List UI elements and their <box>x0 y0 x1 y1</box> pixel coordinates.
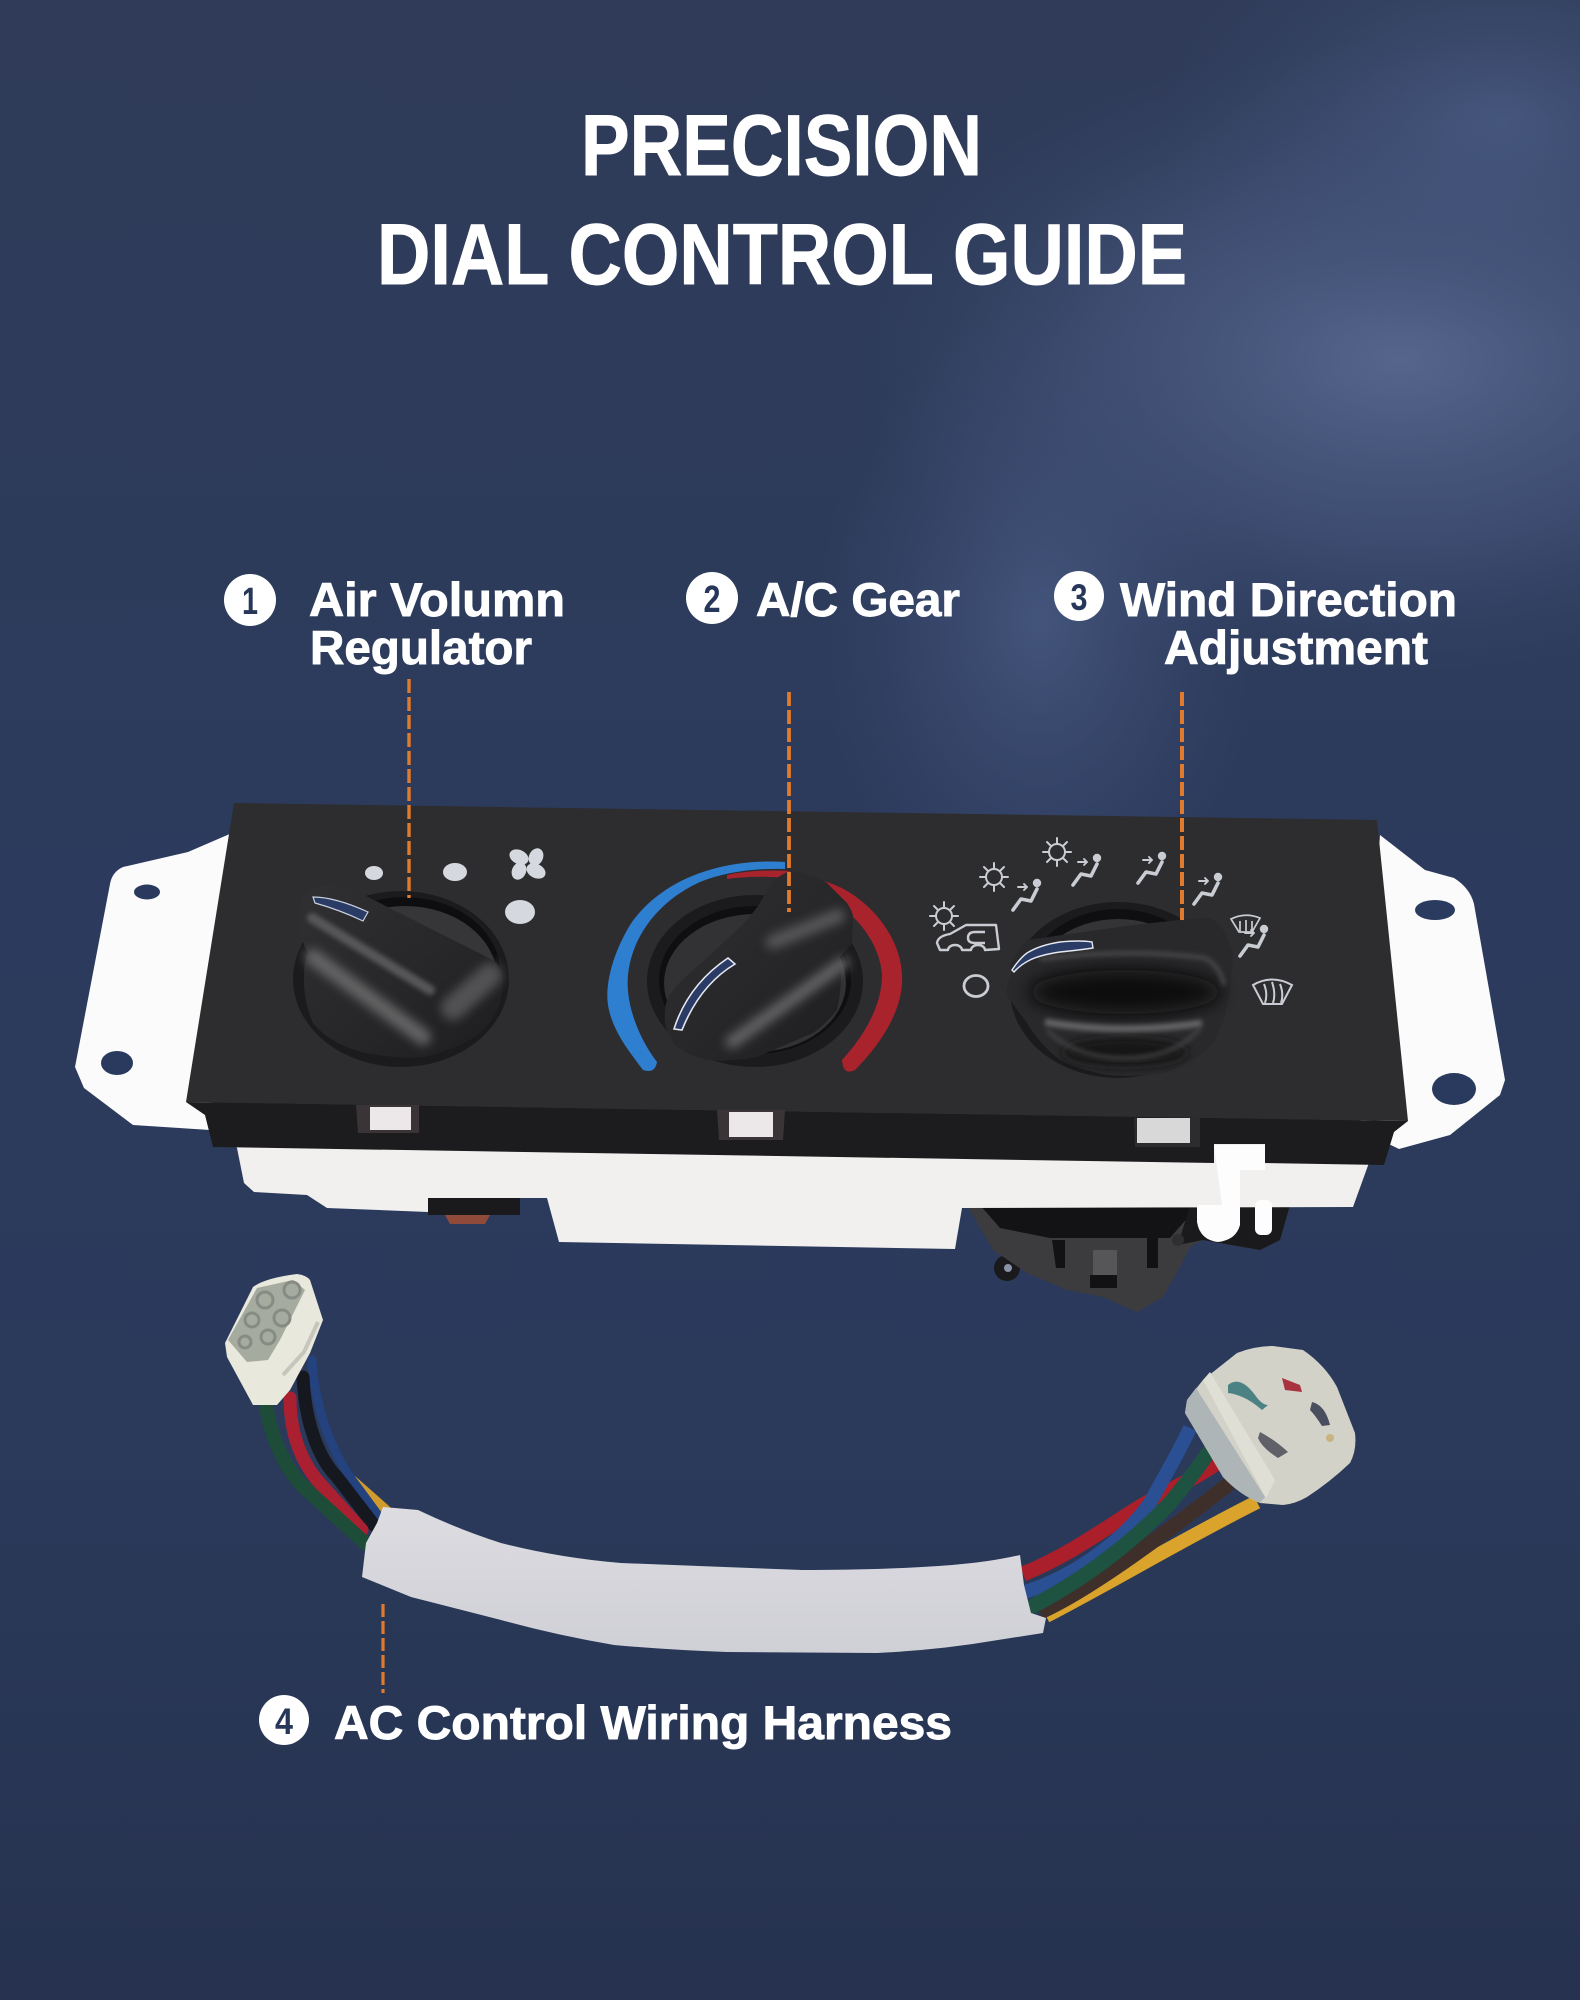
callout 3: wind direction adjustment: 3 <box>1070 577 1088 618</box>
icon: seat vent 4 <box>1194 873 1222 904</box>
icon: fan <box>507 846 548 882</box>
control panel unit <box>75 803 1505 1312</box>
strip tabs <box>356 1105 1200 1147</box>
lower black mechanism <box>967 1205 1290 1312</box>
icon: off ring <box>964 976 988 996</box>
callout 1: air volumn regulator: 1 <box>242 581 258 623</box>
callout 2: a/c gear: A/C Gear <box>756 573 960 626</box>
wiring harness <box>225 1274 1355 1653</box>
left mounting flange <box>75 833 240 1130</box>
right wires <box>1023 1428 1257 1616</box>
callout 4: ac control wiring harness: AC Control Wiring Harness <box>334 1696 952 1749</box>
left wires <box>266 1360 386 1544</box>
callout 3: wind direction adjustment <box>1054 571 1457 674</box>
right connector <box>1185 1346 1355 1505</box>
icon: defrost <box>1253 980 1292 1004</box>
callout 1: air volumn regulator: Regulator <box>310 621 532 674</box>
fan speed markers <box>365 846 548 924</box>
title: DIAL CONTROL GUIDE <box>377 207 1187 303</box>
icon: snowflake sun <box>980 863 1008 891</box>
callout 1: air volumn regulator <box>224 573 565 674</box>
leader line 3 <box>1180 692 1184 920</box>
icon: seat with windshield <box>1231 915 1268 956</box>
leader line 4 <box>381 1604 385 1693</box>
knob 3 <box>1006 902 1233 1078</box>
callout 1: air volumn regulator: Air Volumn <box>309 573 565 626</box>
icon: seat vent 3 <box>1138 852 1166 883</box>
foam sleeve <box>362 1507 1046 1653</box>
mode icons around knob 3 <box>930 838 1292 1004</box>
callout 2: a/c gear: 2 <box>704 579 720 621</box>
left connector <box>225 1274 323 1405</box>
white posts <box>1197 1145 1272 1242</box>
icon: sun top <box>1043 838 1071 866</box>
title <box>377 98 1187 303</box>
knob 1 <box>293 886 509 1067</box>
callout 3: wind direction adjustment: Wind Direction <box>1120 573 1457 626</box>
knob 2 <box>647 872 863 1067</box>
right mounting flange <box>1360 835 1505 1149</box>
icon: seat vent 1 <box>1013 879 1041 910</box>
small rear connector <box>428 1197 520 1224</box>
leader line 2 <box>787 692 791 912</box>
panel face <box>186 803 1408 1121</box>
icon: seat vent 2 <box>1073 854 1101 885</box>
callout 4: ac control wiring harness: 4 <box>275 1701 293 1742</box>
temperature arc: blue <box>607 862 785 1071</box>
icon: vehicle recirculate <box>937 925 999 950</box>
temperature arc: red <box>727 870 902 1072</box>
title: PRECISION <box>581 98 982 194</box>
dark front strip <box>186 1102 1408 1165</box>
callout 3: wind direction adjustment: Adjustment <box>1164 621 1428 674</box>
white housing <box>230 1130 1370 1249</box>
leader line 1 <box>407 679 411 898</box>
